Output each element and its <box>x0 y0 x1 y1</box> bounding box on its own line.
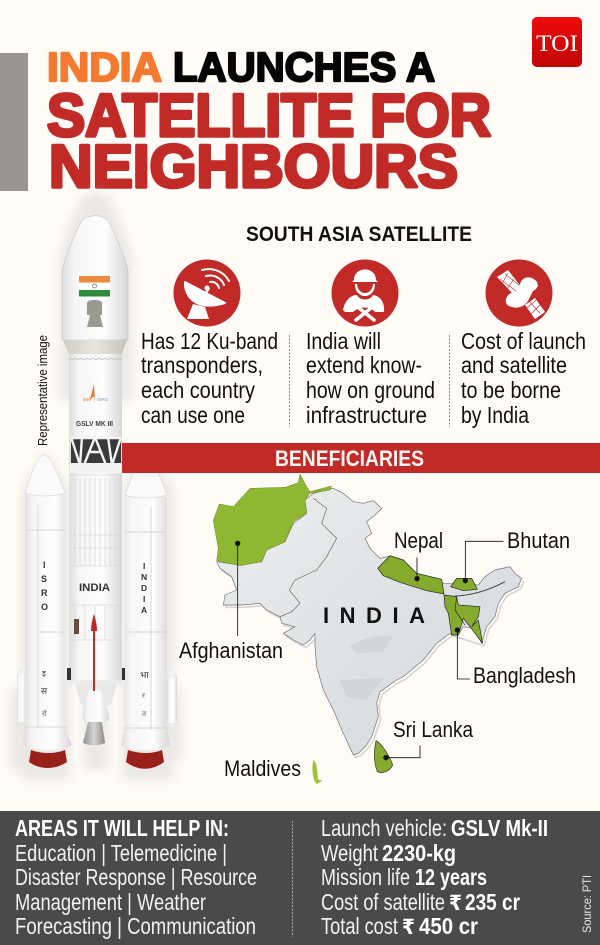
text: transponders: can use one <box>141 402 245 428</box>
map of south asia <box>213 474 524 784</box>
map shadow <box>219 564 524 757</box>
text: transponders: Has 12 Ku-band <box>141 328 278 354</box>
icon: satellite dish <box>174 260 240 326</box>
left booster: S <box>41 574 47 584</box>
ISRO logo <box>83 384 109 404</box>
icon: worker <box>332 260 398 326</box>
left booster: R <box>41 588 48 598</box>
india map label: INDIA <box>323 603 425 628</box>
text: launch cost: and satellite <box>461 352 567 378</box>
key facts: Mission life <box>321 864 410 890</box>
areas it will help in: AREAS IT WILL HELP IN: <box>15 815 229 841</box>
text: transponders: transponders, <box>141 352 263 378</box>
sri lanka <box>374 741 393 773</box>
key facts: ₹ <box>449 891 462 915</box>
country labels: Afghanistan <box>179 638 283 663</box>
right booster: I <box>143 594 145 604</box>
key facts: 12 years <box>415 864 487 890</box>
text: know-how: infrastructure <box>306 402 427 428</box>
title: SATELLITE FOR <box>47 82 491 149</box>
india and pakistan landmass <box>217 488 522 755</box>
beneficiaries banner <box>122 443 600 473</box>
payload fairing <box>62 216 128 340</box>
representative image note: Representative image <box>35 335 50 446</box>
country labels: Sri Lanka <box>393 717 473 742</box>
afghanistan <box>213 474 332 566</box>
country labels: Nepal <box>394 528 443 553</box>
right booster: N <box>141 572 147 582</box>
key facts: Cost of satellite <box>321 889 445 915</box>
areas it will help in: Management | Weather <box>15 889 206 915</box>
right booster: A <box>141 605 147 615</box>
emblem <box>87 300 103 327</box>
maldives <box>312 760 323 784</box>
key facts: GSLV Mk-II <box>451 815 548 841</box>
text: know-how <box>306 328 435 428</box>
text: know-how: India will <box>306 328 381 354</box>
country labels: Maldives <box>224 756 301 781</box>
title: INDIA <box>47 44 162 90</box>
grey side bar <box>0 53 28 191</box>
TOI logo <box>532 17 582 67</box>
key facts: 2230-kg <box>382 840 456 866</box>
left booster: रो <box>42 709 47 718</box>
areas it will help in: Education | Telemedicine | <box>15 840 227 866</box>
bangladesh <box>444 595 483 643</box>
left booster <box>17 455 72 768</box>
central engine <box>65 668 127 745</box>
key facts: ₹ <box>402 915 415 939</box>
footer panel <box>0 811 600 945</box>
ISRO logo: ISRO <box>97 397 109 402</box>
right booster: I <box>143 561 145 571</box>
leader dots <box>235 541 468 760</box>
country labels: Bhutan <box>507 528 570 553</box>
right booster: भा <box>140 671 149 681</box>
icon: satellite <box>486 260 552 326</box>
areas it will help in: Forecasting | Communication <box>15 913 256 939</box>
central stage <box>69 354 122 684</box>
text: know-how: extend know- <box>306 352 422 378</box>
nepal <box>378 556 444 594</box>
key facts: Launch vehicle: <box>321 815 447 841</box>
bhutan <box>451 578 477 591</box>
text: launch cost <box>461 328 586 428</box>
right booster: र <box>142 692 145 700</box>
heading: south asia satellite: SOUTH ASIA SATELLITE <box>246 223 472 246</box>
right booster <box>121 456 177 769</box>
right booster: त <box>142 710 147 718</box>
left booster: इ <box>42 669 47 678</box>
key facts: 235 cr <box>465 889 520 915</box>
left booster: O <box>41 602 48 612</box>
right booster: D <box>141 583 147 593</box>
text: launch cost: by India <box>461 402 529 428</box>
key facts: Total cost <box>321 913 398 939</box>
leader lines <box>238 541 503 758</box>
beneficiaries banner: BENEFICIARIES <box>275 446 424 471</box>
ISRO logo: इसरो <box>83 396 92 402</box>
key facts: 450 cr <box>419 913 478 939</box>
rocket shadow <box>10 192 182 780</box>
rocket illustration <box>10 192 182 780</box>
text: launch cost: to be borne <box>461 377 561 403</box>
INDIA on stage: INDIA <box>79 582 110 594</box>
country labels <box>179 528 576 781</box>
title: LAUNCHES A <box>173 44 435 90</box>
text: transponders: each country <box>141 377 255 403</box>
key facts: Weight <box>321 840 378 866</box>
flag on fairing <box>79 276 110 296</box>
red arrow <box>91 614 97 691</box>
title: NEIGHBOURS <box>49 133 458 200</box>
text: know-how: how on ground <box>306 377 435 403</box>
TOI logo: TOI <box>536 31 578 56</box>
areas it will help in: Disaster Response | Resource <box>15 864 257 890</box>
stage window <box>74 619 79 634</box>
text: transponders <box>141 328 278 428</box>
country labels: Bangladesh <box>473 663 576 688</box>
truss section <box>70 437 122 473</box>
left booster: I <box>43 560 46 570</box>
areas it will help in <box>15 815 257 939</box>
GSLV label: GSLV MK III <box>76 421 113 428</box>
left booster: स <box>41 687 48 697</box>
key facts <box>321 815 548 939</box>
source credit: Source: PTI <box>580 875 594 933</box>
title <box>47 44 491 200</box>
stage ribs <box>70 475 122 640</box>
